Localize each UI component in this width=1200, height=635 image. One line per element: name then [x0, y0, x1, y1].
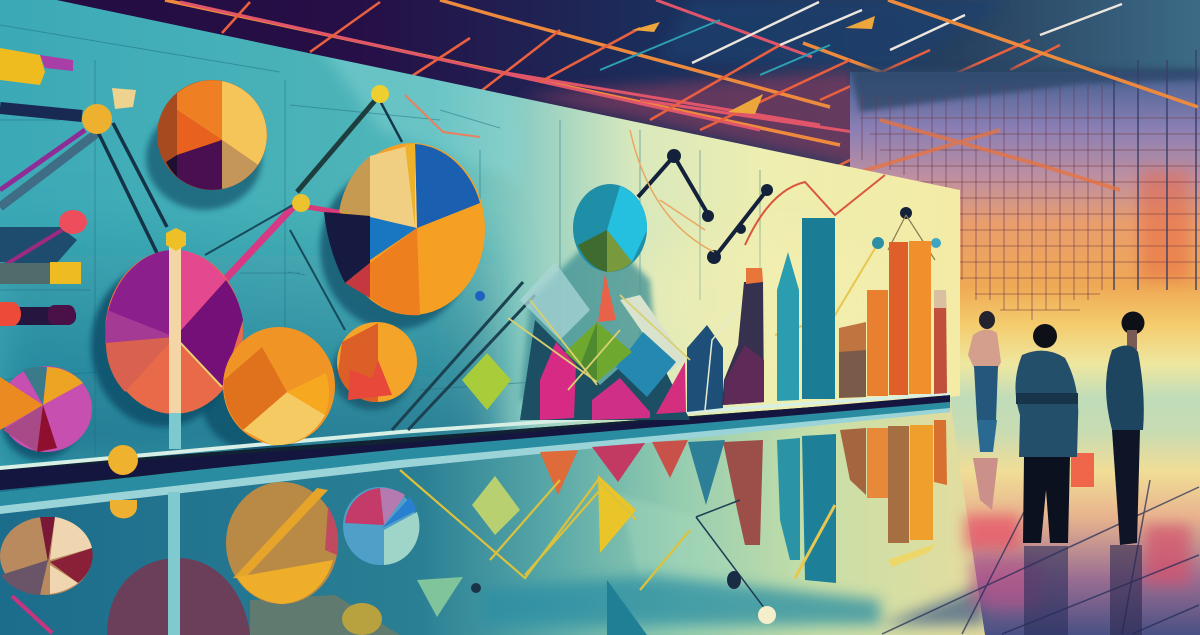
right floor details	[882, 453, 1199, 634]
pie chart: top left	[157, 80, 267, 190]
reflective floor	[0, 400, 985, 635]
reflection: pies	[0, 482, 481, 635]
pie chart: purple and orange	[105, 228, 243, 449]
pie chart: orange lower	[223, 327, 335, 445]
black line with nodes	[475, 130, 935, 335]
reflection: bars and triangles	[400, 420, 947, 624]
left wall tags	[0, 48, 136, 326]
line chart with nodes, left	[0, 85, 480, 475]
pie chart: far left multicolour	[0, 366, 92, 452]
ceiling	[0, 0, 1200, 220]
pie chart: teal	[573, 184, 647, 272]
person: middle	[1015, 324, 1078, 635]
pie chart: small orange	[337, 322, 417, 402]
person: far	[968, 311, 1001, 510]
pie chart: centre large	[324, 143, 485, 315]
wall	[0, 0, 960, 470]
wall base ledge	[0, 392, 950, 514]
back room with grid	[850, 0, 1200, 635]
person: near	[1106, 312, 1144, 635]
bar chart	[722, 218, 947, 405]
diamond and triangle chart	[392, 262, 745, 430]
